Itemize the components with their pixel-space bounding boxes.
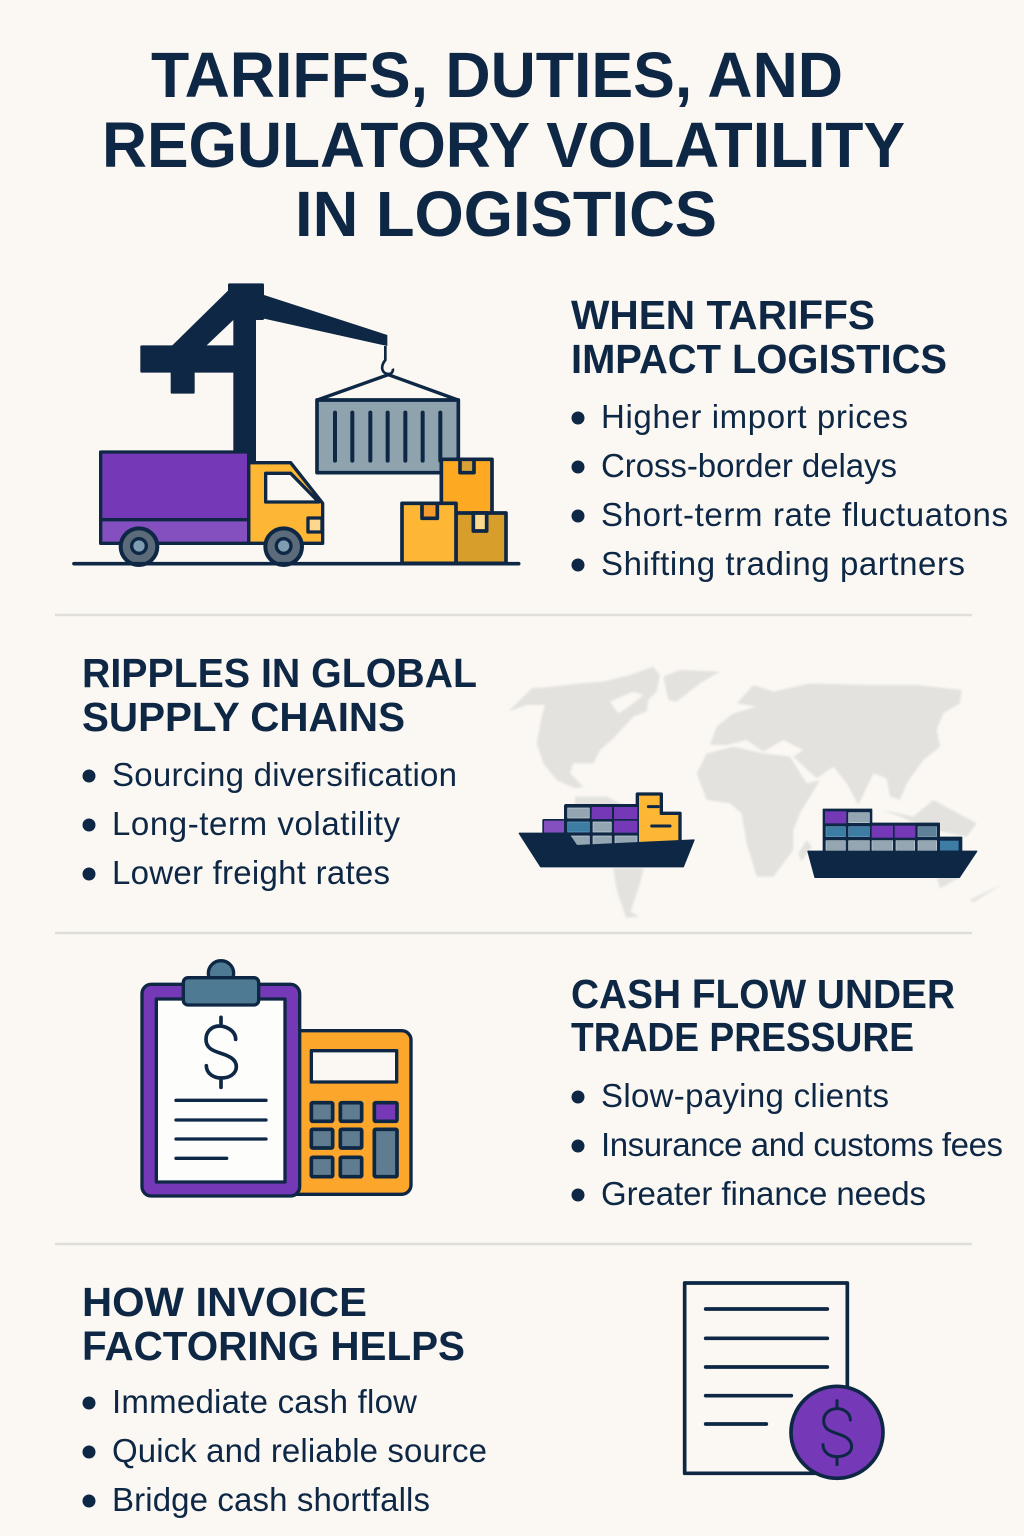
title: IN LOGISTICS — [295, 178, 717, 250]
section text: how invoice factoring helps: Immediate cash flow — [112, 1383, 417, 1420]
section text: when tariffs impact logistics: Higher import prices — [601, 398, 908, 435]
icon: invoice document with dollar coin — [685, 1283, 883, 1478]
section text: how invoice factoring helps: Quick and reliable source — [112, 1432, 487, 1469]
section text: when tariffs impact logistics: Shifting trading partners — [601, 545, 965, 582]
section text: how invoice factoring helps: FACTORING HELPS — [82, 1323, 465, 1369]
section text: cash flow under trade pressure: Insurance and customs fees — [601, 1126, 1003, 1163]
boxes — [402, 459, 506, 563]
section text: when tariffs impact logistics: IMPACT LOGISTICS — [571, 336, 947, 382]
section text: ripples in global supply chains: Long-term volatility — [112, 805, 400, 842]
section text: when tariffs impact logistics: Short-term rate fluctuatons — [601, 496, 1008, 533]
ground line — [74, 558, 519, 569]
hanging container — [317, 346, 458, 473]
calculator — [287, 1031, 411, 1194]
illustration: world map with cargo ships — [508, 667, 1003, 918]
title: REGULATORY VOLATILITY — [102, 109, 905, 181]
section text: cash flow under trade pressure: CASH FLOW UNDER — [571, 971, 955, 1017]
section text: how invoice factoring helps — [82, 1279, 487, 1518]
title: TARIFFS, DUTIES, AND — [151, 39, 843, 111]
section text: ripples in global supply chains — [82, 650, 477, 891]
truck — [101, 452, 323, 565]
ship 1 — [519, 794, 694, 867]
section text: cash flow under trade pressure: Slow-paying clients — [601, 1077, 889, 1114]
section text: ripples in global supply chains: RIPPLES IN GLOBAL — [82, 650, 477, 696]
section text: when tariffs impact logistics — [571, 292, 1008, 582]
section text: cash flow under trade pressure: TRADE PRESSURE — [571, 1014, 914, 1060]
ship 2 — [808, 809, 977, 877]
section text: when tariffs impact logistics: WHEN TARIFFS — [571, 292, 875, 338]
section text: cash flow under trade pressure: Greater finance needs — [601, 1175, 926, 1212]
section text: ripples in global supply chains: Lower freight rates — [112, 854, 390, 891]
section text: cash flow under trade pressure — [571, 971, 1003, 1212]
section text: how invoice factoring helps: HOW INVOICE — [82, 1279, 367, 1325]
title — [102, 39, 905, 250]
section text: when tariffs impact logistics: Cross-border delays — [601, 447, 897, 484]
section text: how invoice factoring helps: Bridge cash shortfalls — [112, 1481, 430, 1518]
world map — [508, 667, 1003, 918]
clipboard — [142, 961, 300, 1196]
crane — [140, 283, 387, 463]
illustration: clipboard and calculator — [142, 961, 411, 1196]
illustration: crane, truck, container and boxes — [74, 283, 519, 565]
section text: ripples in global supply chains: Sourcing diversification — [112, 756, 457, 793]
section text: ripples in global supply chains: SUPPLY CHAINS — [82, 694, 405, 740]
